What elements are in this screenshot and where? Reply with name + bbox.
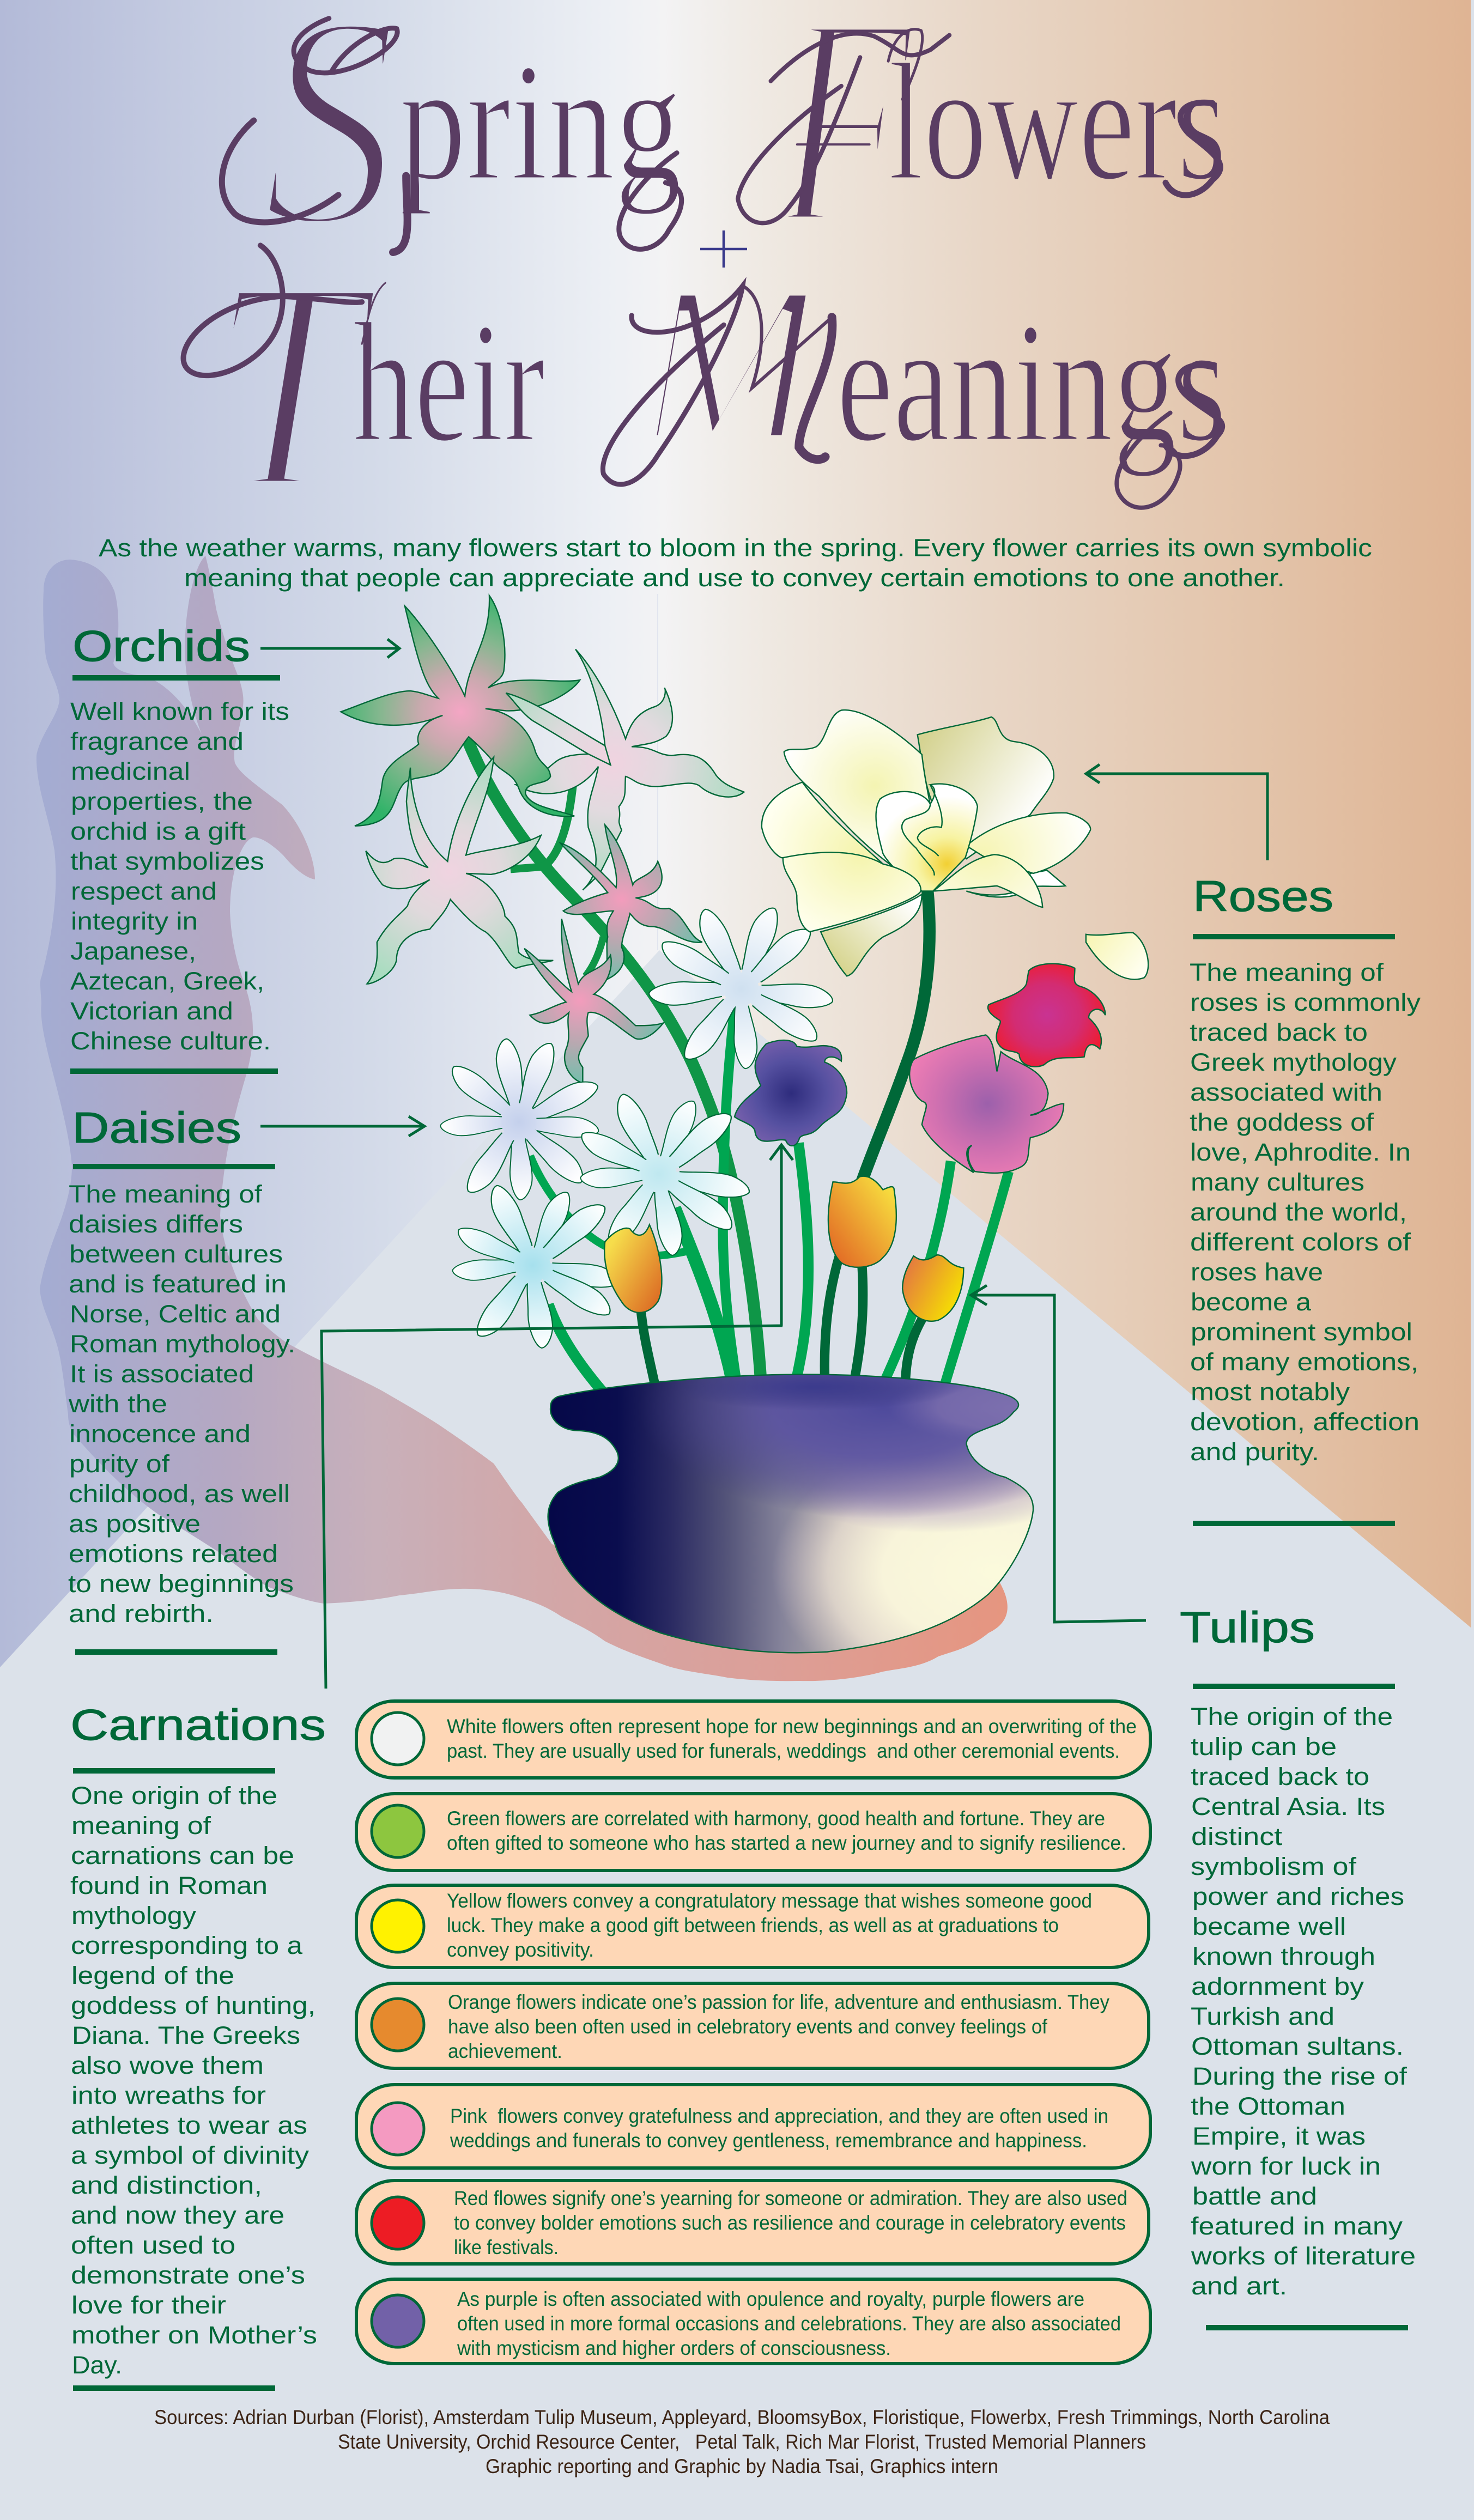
intro text: As the weather warms, many flowers start to bloom in the spring. Every flower carries its own symbolic [99,534,1372,562]
panel: tulips: adornment by [1191,1972,1364,2000]
legend: orange flowers: Orange flowers indicate one’s passion for life, adventure and enthusiasm. They [448,1991,1109,2013]
panel: carnations: love for their [71,2291,226,2319]
panel: daisies: It is associated [70,1360,254,1388]
panel: tulips: power and riches [1192,1883,1404,1910]
panel: roses: roses have [1191,1258,1323,1286]
panel: tulips: worn for luck in [1191,2152,1381,2180]
panel: roses: traced back to [1190,1018,1368,1046]
panel: roses: The meaning of [1190,958,1384,986]
legend: pink flowers: Pink flowers convey gratefulness and appreciation, and they are often used in [450,2105,1108,2127]
title: eanings [836,287,1227,478]
panel: orchids [70,622,289,1074]
title: heir [353,287,545,478]
legend: red flowers [356,2181,1149,2264]
panel: carnations: meaning of [71,1812,211,1839]
panel: roses: roses is commonly [1190,988,1421,1016]
panel: carnations: athletes to wear as [71,2111,307,2139]
panel: daisies: to new beginnings [68,1570,294,1598]
panel: orchids: respect and [71,877,217,905]
red flower [988,964,1106,1067]
panel: roses: Greek mythology [1190,1048,1397,1076]
legend: green flowers: Green flowers are correlated with harmony, good health and fortune. They are [447,1807,1105,1830]
panel: roses: become a [1191,1288,1312,1316]
panel: orchids: Well known for its [70,697,289,725]
panel: tulips: and art. [1191,2272,1287,2300]
panel: carnations: carnations can be [71,1842,294,1869]
orchid 2 upper petals overlap [506,693,610,765]
panel: roses: around the world, [1190,1198,1407,1226]
panel: daisies: with the [68,1390,167,1418]
panel: roses [1190,872,1421,1526]
panel: orchids: Japanese, [70,937,196,965]
daisy 2 [440,1037,602,1200]
panel: carnations [70,1701,326,2391]
legend: orange flowers: have also been often used in celebratory events and convey feelings of [448,2015,1048,2038]
flower bouquet [341,596,1148,1401]
tulip right [902,1255,963,1321]
title flourishes [184,19,1222,508]
panel: carnations: Carnations [70,1701,326,1749]
legend: purple flowers [356,2279,1150,2364]
panel: orchids: medicinal [71,757,190,785]
legend: yellow flowers: luck. They make a good gift between friends, as well as at graduations to [447,1914,1059,1936]
panel: roses: prominent symbol [1191,1318,1412,1346]
legend: red flowers: like festivals. [454,2236,559,2258]
panel: daisies: emotions related [69,1540,278,1568]
panel: daisies [68,1103,295,1655]
panel: roses: of many emotions, [1190,1348,1418,1376]
panel: carnations: Day. [72,2351,122,2379]
legend: purple flowers: with mysticism and higher orders of consciousness. [457,2337,891,2359]
panel: tulips: Empire, it was [1192,2122,1366,2150]
legend: pink flowers: weddings and funerals to convey gentleness, remembrance and happiness. [450,2129,1087,2152]
arrow: carnations [322,1145,793,1689]
background light polygon [0,950,1474,2520]
orchid 2 [506,649,744,890]
panel: tulips: battle and [1192,2182,1317,2210]
sources: Graphic reporting and Graphic by Nadia Tsai, Graphics intern [486,2455,998,2478]
legend: white flowers: past. They are usually used for funerals, weddings and other ceremonial events. [447,1740,1120,1762]
panel: carnations: a symbol of divinity [71,2141,310,2169]
panel: roses: many cultures [1191,1168,1364,1196]
panel: carnations: goddess of hunting, [71,1991,316,2019]
purple flower [735,1040,847,1146]
panel: orchids: integrity in [71,907,198,935]
panel: orchids: Orchids [72,622,250,670]
sources [154,2406,1330,2478]
sources: State University, Orchid Resource Center, Petal Talk, Rich Mar Florist, Trusted Memorial Planners [338,2431,1146,2453]
panel: tulips: tulip can be [1191,1733,1337,1760]
panel: orchids: orchid is a gift [70,817,246,845]
panel: tulips: The origin of the [1191,1703,1393,1730]
panel: orchids: Aztecan, Greek, [70,967,264,995]
legend: yellow flowers [356,1885,1149,1968]
panel: carnations: corresponding to a [71,1932,303,1959]
orchid 4 [561,825,702,981]
panel: carnations: found in Roman [70,1872,268,1899]
panel: daisies: between cultures [69,1240,283,1268]
panel: daisies: and rebirth. [69,1600,214,1628]
panel: roses: devotion, affection [1190,1408,1420,1436]
legend: pink flowers [356,2085,1150,2168]
orchid 5 [524,919,663,1083]
panel: tulips: the Ottoman [1191,2092,1345,2120]
plus sign [700,230,747,268]
daisy 4 [452,1182,621,1349]
panel: orchids: fragrance and [70,727,244,755]
intro text [99,534,1372,592]
panel: tulips: became well [1192,1912,1346,1940]
title: T [210,217,381,552]
panel: daisies: innocence and [69,1420,251,1448]
panel: tulips: symbolism of [1191,1853,1357,1880]
panel: daisies: and is featured in [69,1270,287,1298]
panel: carnations: One origin of the [71,1782,277,1809]
white rose [762,710,1090,976]
panel: carnations: and now they are [71,2201,284,2229]
panel: carnations: legend of the [71,1962,234,1989]
legend: green flowers: often gifted to someone who has started a new journey and to signify resilience. [447,1832,1126,1854]
panel: daisies: as positive [69,1510,201,1538]
legend: yellow flowers: Yellow flowers convey a congratulatory message that wishes someone good [447,1890,1092,1912]
panel: tulips: Central Asia. Its [1191,1793,1385,1820]
panel: carnations: into wreaths for [71,2081,266,2109]
orchid 1 [341,596,580,826]
daisy 3 [576,1090,752,1256]
panel: tulips: known through [1192,1942,1375,1970]
panel: carnations: demonstrate one’s [71,2261,305,2289]
legend: orange flowers: achievement. [448,2040,562,2062]
panel: carnations: and distinction, [71,2171,262,2199]
panel: orchids: properties, the [71,787,253,815]
panel: tulips: Tulips [1180,1603,1315,1651]
tulip large [828,1176,896,1267]
legend: red flowers: to convey bolder emotions such as resilience and courage in celebratory events [454,2212,1126,2234]
panel: carnations: mythology [71,1902,197,1929]
panel: carnations: Diana. The Greeks [72,2021,300,2049]
panel: daisies: purity of [69,1450,170,1478]
panel: roses: Roses [1193,872,1333,920]
panel: daisies: Daisies [72,1103,241,1152]
panel: tulips: Ottoman sultans. [1191,2032,1404,2060]
panel: orchids: that symbolizes [70,847,264,875]
panel: carnations: also wove them [71,2051,264,2079]
legend: yellow flowers: convey positivity. [447,1939,594,1961]
legend: green flowers [356,1794,1150,1871]
panel: daisies: daisies differs [69,1210,243,1238]
panel: roses: different colors of [1190,1228,1411,1256]
panel: roses: and purity. [1190,1438,1319,1466]
centre hairline [657,594,658,950]
panel: tulips: distinct [1191,1823,1283,1850]
panel: tulips: traced back to [1191,1763,1369,1790]
panel: daisies: childhood, as well [69,1480,290,1508]
panel: tulips: Turkish and [1191,2002,1335,2030]
pink flower [909,1035,1064,1173]
panel: daisies: The meaning of [69,1180,263,1208]
panel: tulips: works of literature [1191,2242,1416,2270]
title: lowers [888,29,1227,216]
stems [467,739,1009,1401]
vase [538,1363,1039,1658]
panel: carnations: often used to [71,2231,235,2259]
panel: daisies: Roman mythology. [70,1330,295,1358]
panel: roses: love, Aphrodite. In [1190,1138,1411,1166]
orchid 3 [366,757,553,984]
legend: purple flowers: often used in more formal occasions and celebrations. They are also associated [457,2312,1121,2335]
panel: daisies: Norse, Celtic and [70,1300,281,1328]
title: M [632,236,833,490]
panel: roses: associated with [1190,1078,1382,1106]
panel: orchids: Victorian and [70,997,233,1025]
panel: roses: the goddess of [1190,1108,1374,1136]
panel: orchids: Chinese culture. [70,1027,271,1055]
title: pring [399,29,682,216]
sources: Sources: Adrian Durban (Florist), Amsterdam Tulip Museum, Appleyard, BloomsyBox, Floristique, Flowerbx, Fresh Trimmings, North Carolina [154,2406,1330,2428]
legend: purple flowers: As purple is often associated with opulence and royalty, purple flowers are [457,2288,1084,2310]
panel: tulips: featured in many [1191,2212,1403,2240]
falling petal [1086,933,1148,979]
legend: white flowers: White flowers often represent hope for new beginnings and an overwriting of the [447,1715,1137,1738]
panel: tulips: During the rise of [1192,2062,1408,2090]
intro text: meaning that people can appreciate and use to convey certain emotions to one another. [184,564,1285,592]
legend: white flowers [356,1701,1150,1778]
panel: tulips [1180,1603,1416,2330]
arrow: tulips [971,1285,1146,1622]
arrow: daisies [260,1116,424,1136]
panel: carnations: mother on Mother’s [71,2321,317,2349]
daisy 1 [648,903,835,1069]
arrow: orchids [260,639,399,658]
legend: red flowers: Red flowes signify one’s yearning for someone or admiration. They are also used [454,2187,1127,2209]
flower shadow shape [37,556,1008,1681]
title [184,0,1227,552]
tulip left [604,1225,662,1313]
panel: roses: most notably [1191,1378,1350,1406]
legend: orange flowers [356,1983,1149,2068]
arrow: roses [1086,764,1267,860]
right edge strip [1471,0,1474,2520]
